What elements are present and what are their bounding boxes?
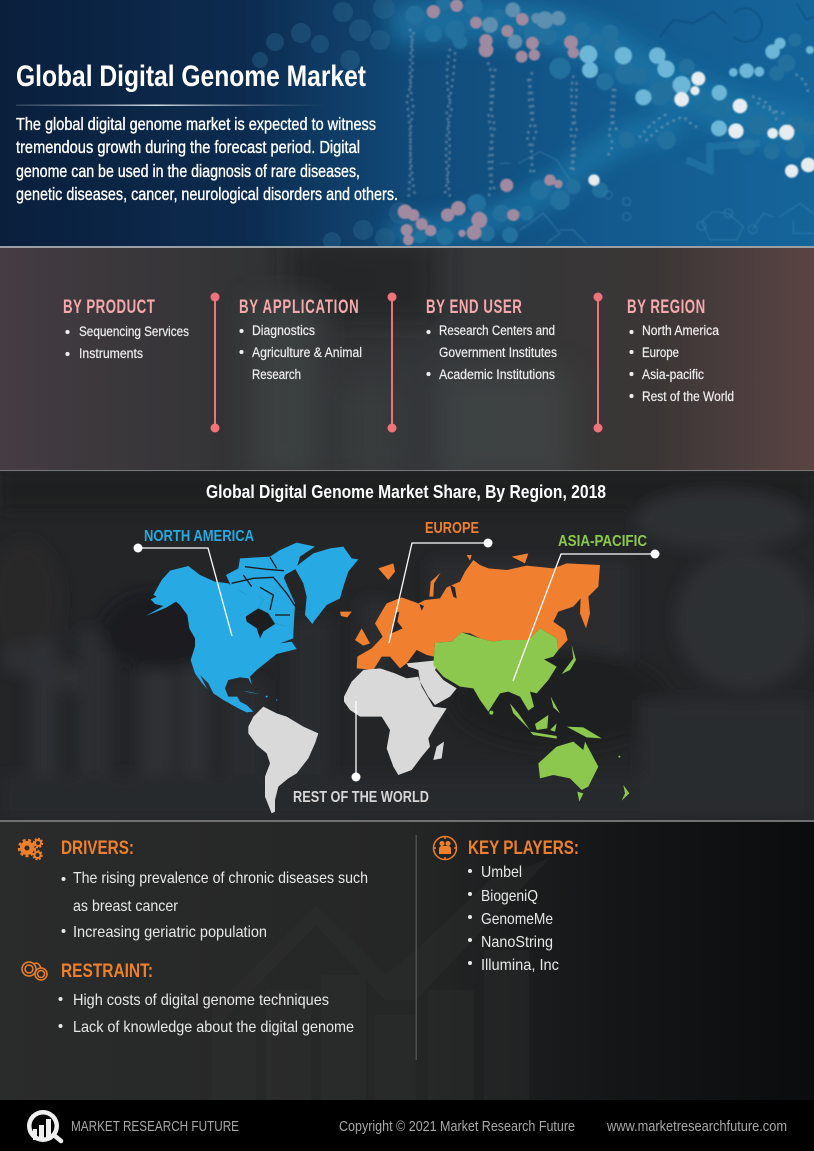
list: drivers: as breast cancer bbox=[73, 898, 179, 915]
blurred photo background bbox=[7, 495, 811, 807]
list: drivers bbox=[62, 870, 368, 941]
intro text: genetic diseases, cancer, neurological disorders and others. bbox=[16, 184, 398, 204]
icon: logo bbox=[27, 1110, 61, 1142]
panel: header banner bbox=[0, 0, 814, 250]
baltic bbox=[390, 612, 403, 634]
divider 3 bbox=[594, 292, 602, 432]
column: by application: Research bbox=[252, 367, 301, 382]
column: by end user bbox=[426, 295, 557, 382]
map: europe and russia bbox=[340, 553, 600, 670]
map: north and south america bbox=[146, 543, 358, 813]
list: drivers: Increasing geriatric population bbox=[73, 924, 267, 941]
column: by end user: BY END USER bbox=[426, 295, 522, 318]
column: by end user: Academic Institutions bbox=[439, 367, 555, 382]
intro text: tremendous growth during the forecast period. Digital bbox=[16, 137, 360, 157]
icon: key players target bbox=[433, 836, 457, 860]
column: by product: BY PRODUCT bbox=[63, 295, 155, 318]
title underline bbox=[16, 104, 326, 106]
column: by application: Agriculture & Animal bbox=[252, 345, 362, 360]
panel: segmentation band bbox=[0, 235, 814, 480]
callout: rest of the world bbox=[293, 701, 429, 806]
list: key players: NanoString bbox=[481, 934, 553, 951]
callout: north america: NORTH AMERICA bbox=[144, 528, 254, 545]
dim helix circles reaching left bbox=[252, 0, 431, 250]
icon: handcuffs bbox=[22, 962, 47, 980]
mid blue spheres bbox=[406, 0, 814, 245]
map: asia-pacific bbox=[433, 628, 629, 802]
column: by application: BY APPLICATION bbox=[239, 295, 359, 318]
south america bbox=[248, 707, 318, 813]
callout: rest of the world: REST OF THE WORLD bbox=[293, 789, 429, 806]
heading: key players: KEY PLAYERS: bbox=[468, 838, 579, 859]
map: africa and middle east bbox=[344, 660, 457, 775]
title: Global Digital Genome Market bbox=[16, 60, 366, 93]
website: www.marketresearchfuture.com bbox=[606, 1119, 787, 1135]
divider 1 bbox=[210, 292, 220, 432]
column: by region: Asia-pacific bbox=[642, 367, 704, 382]
column divider bbox=[416, 835, 417, 1060]
column: by region: North America bbox=[642, 323, 719, 338]
list: key players: Illumina, Inc bbox=[481, 957, 559, 974]
callout: asia-pacific: ASIA-PACIFIC bbox=[558, 533, 647, 550]
column: by product: Sequencing Services bbox=[79, 324, 189, 339]
map title: Global Digital Genome Market Share, By Region, 2018 bbox=[206, 482, 606, 502]
panel: drivers, restraint, key players bbox=[0, 822, 814, 1100]
brand name: MARKET RESEARCH FUTURE bbox=[71, 1119, 239, 1135]
intro text: genome can be used in the diagnosis of rare diseases, bbox=[16, 161, 360, 181]
list: restraint: High costs of digital genome techniques bbox=[73, 992, 329, 1009]
callout: europe: EUROPE bbox=[425, 520, 479, 537]
column: by end user: Government Institutes bbox=[439, 345, 557, 360]
callout: europe bbox=[389, 520, 492, 643]
caribbean bbox=[243, 691, 277, 701]
list: key players: BiogeniQ bbox=[481, 888, 538, 905]
molecule lines bbox=[500, 152, 813, 243]
column: by region: Europe bbox=[642, 345, 679, 360]
column: by product bbox=[63, 295, 189, 361]
intro text: The global digital genome market is expected to witness bbox=[16, 114, 376, 134]
panel: regional market share map bbox=[0, 471, 814, 821]
intro text bbox=[16, 114, 398, 204]
copyright: Copyright © 2021 Market Research Future bbox=[339, 1119, 575, 1135]
heading: restraint: RESTRAINT: bbox=[61, 961, 153, 982]
list: restraint: Lack of knowledge about the digital genome bbox=[73, 1019, 354, 1036]
list: key players: Umbel bbox=[481, 864, 522, 881]
band blur texture bbox=[255, 248, 563, 470]
panel: footer bbox=[0, 1100, 814, 1151]
column: by region bbox=[627, 295, 734, 404]
north america bbox=[146, 543, 358, 712]
list: key players bbox=[468, 864, 559, 974]
dna helix glow bbox=[390, 19, 814, 232]
column: by product: Instruments bbox=[79, 346, 143, 361]
column: by region: Rest of the World bbox=[642, 389, 734, 404]
list: drivers: The rising prevalence of chronic diseases such bbox=[73, 870, 368, 887]
list: key players: GenomeMe bbox=[481, 911, 553, 928]
callout: asia-pacific bbox=[513, 533, 660, 681]
dotted rungs bbox=[407, 30, 808, 200]
heading: drivers: DRIVERS: bbox=[61, 838, 134, 859]
faint arrow chart watermark bbox=[212, 858, 550, 1100]
column: by region: BY REGION bbox=[627, 295, 705, 318]
list: restraint bbox=[58, 992, 354, 1036]
column: by application: Diagnostics bbox=[252, 323, 315, 338]
callout: north america bbox=[134, 528, 254, 636]
icon: gears bbox=[19, 838, 42, 860]
divider 2 bbox=[388, 292, 396, 432]
column: by end user: Research Centers and bbox=[439, 323, 555, 338]
column: by application bbox=[239, 295, 362, 382]
